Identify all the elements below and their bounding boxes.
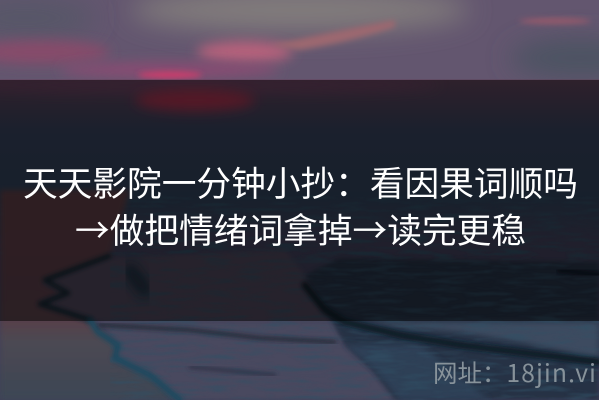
sky (0, 0, 599, 80)
dark overlay band (0, 80, 599, 321)
title (23, 156, 578, 253)
title: 天天影院一分钟小抄：看因果词顺吗 (23, 156, 578, 206)
title: →做把情绪词拿掉→读完更稳 (75, 203, 526, 253)
